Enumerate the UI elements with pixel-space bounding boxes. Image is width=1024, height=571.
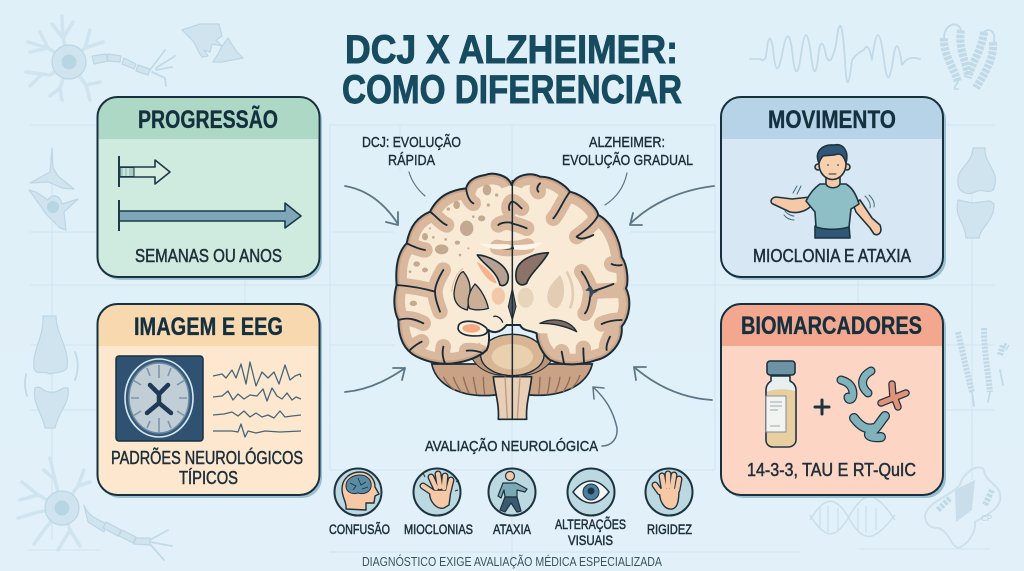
- decoration: synapse left: [25, 316, 78, 428]
- arrow: short timeline: [119, 156, 170, 187]
- decoration: EEG wave top right: [750, 26, 920, 82]
- label: dcj evolução rápida: DCJ: EVOLUÇÃO: [362, 134, 461, 151]
- title: [342, 28, 682, 112]
- arrow: movimento to brain: [630, 186, 714, 225]
- text: 14-3-3, tau e rt-quic: 14-3-3, TAU E RT-QuIC: [747, 460, 916, 480]
- decoration: DNA bottom: [810, 497, 895, 536]
- label: alzheimer evolução gradual: [562, 135, 693, 169]
- text: padrões neurológicos típicos: TÍPICOS: [179, 468, 238, 488]
- brain illustration: [394, 174, 629, 420]
- label: MIOCLONIAS: [404, 522, 473, 537]
- label: CONFUSÃO: [329, 522, 390, 537]
- brain scan: [116, 356, 203, 441]
- icon: plus: [815, 400, 829, 414]
- label: dcj evolução rápida: RÁPIDA: [388, 152, 435, 169]
- label: [555, 517, 626, 548]
- arrow: imagem to brain: [345, 368, 405, 392]
- deep structures: [452, 262, 598, 336]
- label: VISUAIS: [568, 533, 613, 548]
- icon: proteins: [841, 371, 906, 437]
- spongiform lesions: [409, 185, 498, 306]
- outline: [394, 174, 629, 364]
- sulci: [397, 183, 622, 363]
- heading: imagem e eeg: IMAGEM E EEG: [134, 313, 283, 341]
- brainstem: [468, 334, 557, 419]
- footer note: DIAGNÓSTICO EXIGE AVALIAÇÃO MÉDICA ESPECIALIZADA: [362, 554, 662, 569]
- decoration: neuron top left: [26, 16, 175, 100]
- cerebrum: [394, 174, 629, 364]
- panel: imagem e eeg: [98, 304, 322, 498]
- decoration: synapse right: [957, 148, 996, 238]
- arrow: dcj label to brain: [409, 172, 425, 196]
- label: ALTERAÇÕES: [555, 517, 626, 532]
- icon: alterações visuais: [555, 468, 626, 548]
- heading: biomarcadores: BIOMARCADORES: [741, 312, 922, 340]
- label: alzheimer evolução gradual: EVOLUÇÃO GRADUAL: [562, 152, 693, 169]
- text: padrões neurológicos típicos: [111, 447, 303, 488]
- decoration: glia left: [29, 148, 78, 230]
- label: alzheimer evolução gradual: ALZHEIMER:: [589, 135, 665, 151]
- decoration: protein helix top right: [944, 24, 994, 89]
- arrow: biomarcadores to brain: [634, 367, 712, 400]
- icon: person with tremor: [771, 145, 881, 238]
- arrow: progressão to brain: [345, 186, 398, 225]
- midline: [510, 180, 515, 420]
- icon: rigidez: [646, 468, 692, 537]
- decoration: protein structure bottom right: [925, 467, 1000, 548]
- title: DCJ X ALZHEIMER:: [345, 28, 678, 72]
- decoration: protein structure bottom right: CP: [981, 514, 992, 523]
- panel: progressão: [98, 97, 322, 280]
- arrow: alzheimer label to brain: [605, 173, 627, 205]
- cerebellum: [432, 364, 592, 396]
- heading: progressão: PROGRESSÃO: [138, 104, 278, 134]
- icon: ataxia: [488, 468, 536, 537]
- heading: avaliação neurológica: AVALIAÇÃO NEUROLÓGICA: [425, 438, 598, 455]
- label: dcj evolução rápida: [362, 134, 461, 169]
- panel: biomarcadores: [721, 304, 946, 498]
- ventricles: [477, 242, 548, 286]
- decoration: synapse top: [182, 24, 243, 62]
- text: semanas ou anos: SEMANAS OU ANOS: [135, 246, 282, 266]
- text: mioclonia e ataxia: MIOCLONIA E ATAXIA: [753, 246, 911, 266]
- arrow: long timeline: [119, 200, 301, 231]
- title: COMO DIFERENCIAR: [342, 68, 682, 112]
- text: padrões neurológicos típicos: PADRÕES NEUROLÓGICOS: [111, 447, 303, 468]
- icon: vial: [766, 361, 796, 447]
- label: ATAXIA: [493, 522, 531, 537]
- arrow: avaliação to brain: [593, 387, 617, 446]
- eeg traces: [213, 362, 301, 437]
- icon: mioclonias: [404, 468, 473, 537]
- panel: movimento: [721, 97, 946, 280]
- label: RIGIDEZ: [647, 522, 692, 537]
- decoration: protein strands right: [958, 328, 1008, 406]
- icon: confusão: [329, 468, 390, 537]
- heading: movimento: MOVIMENTO: [768, 106, 896, 134]
- decoration: neuron bottom left: [18, 458, 172, 560]
